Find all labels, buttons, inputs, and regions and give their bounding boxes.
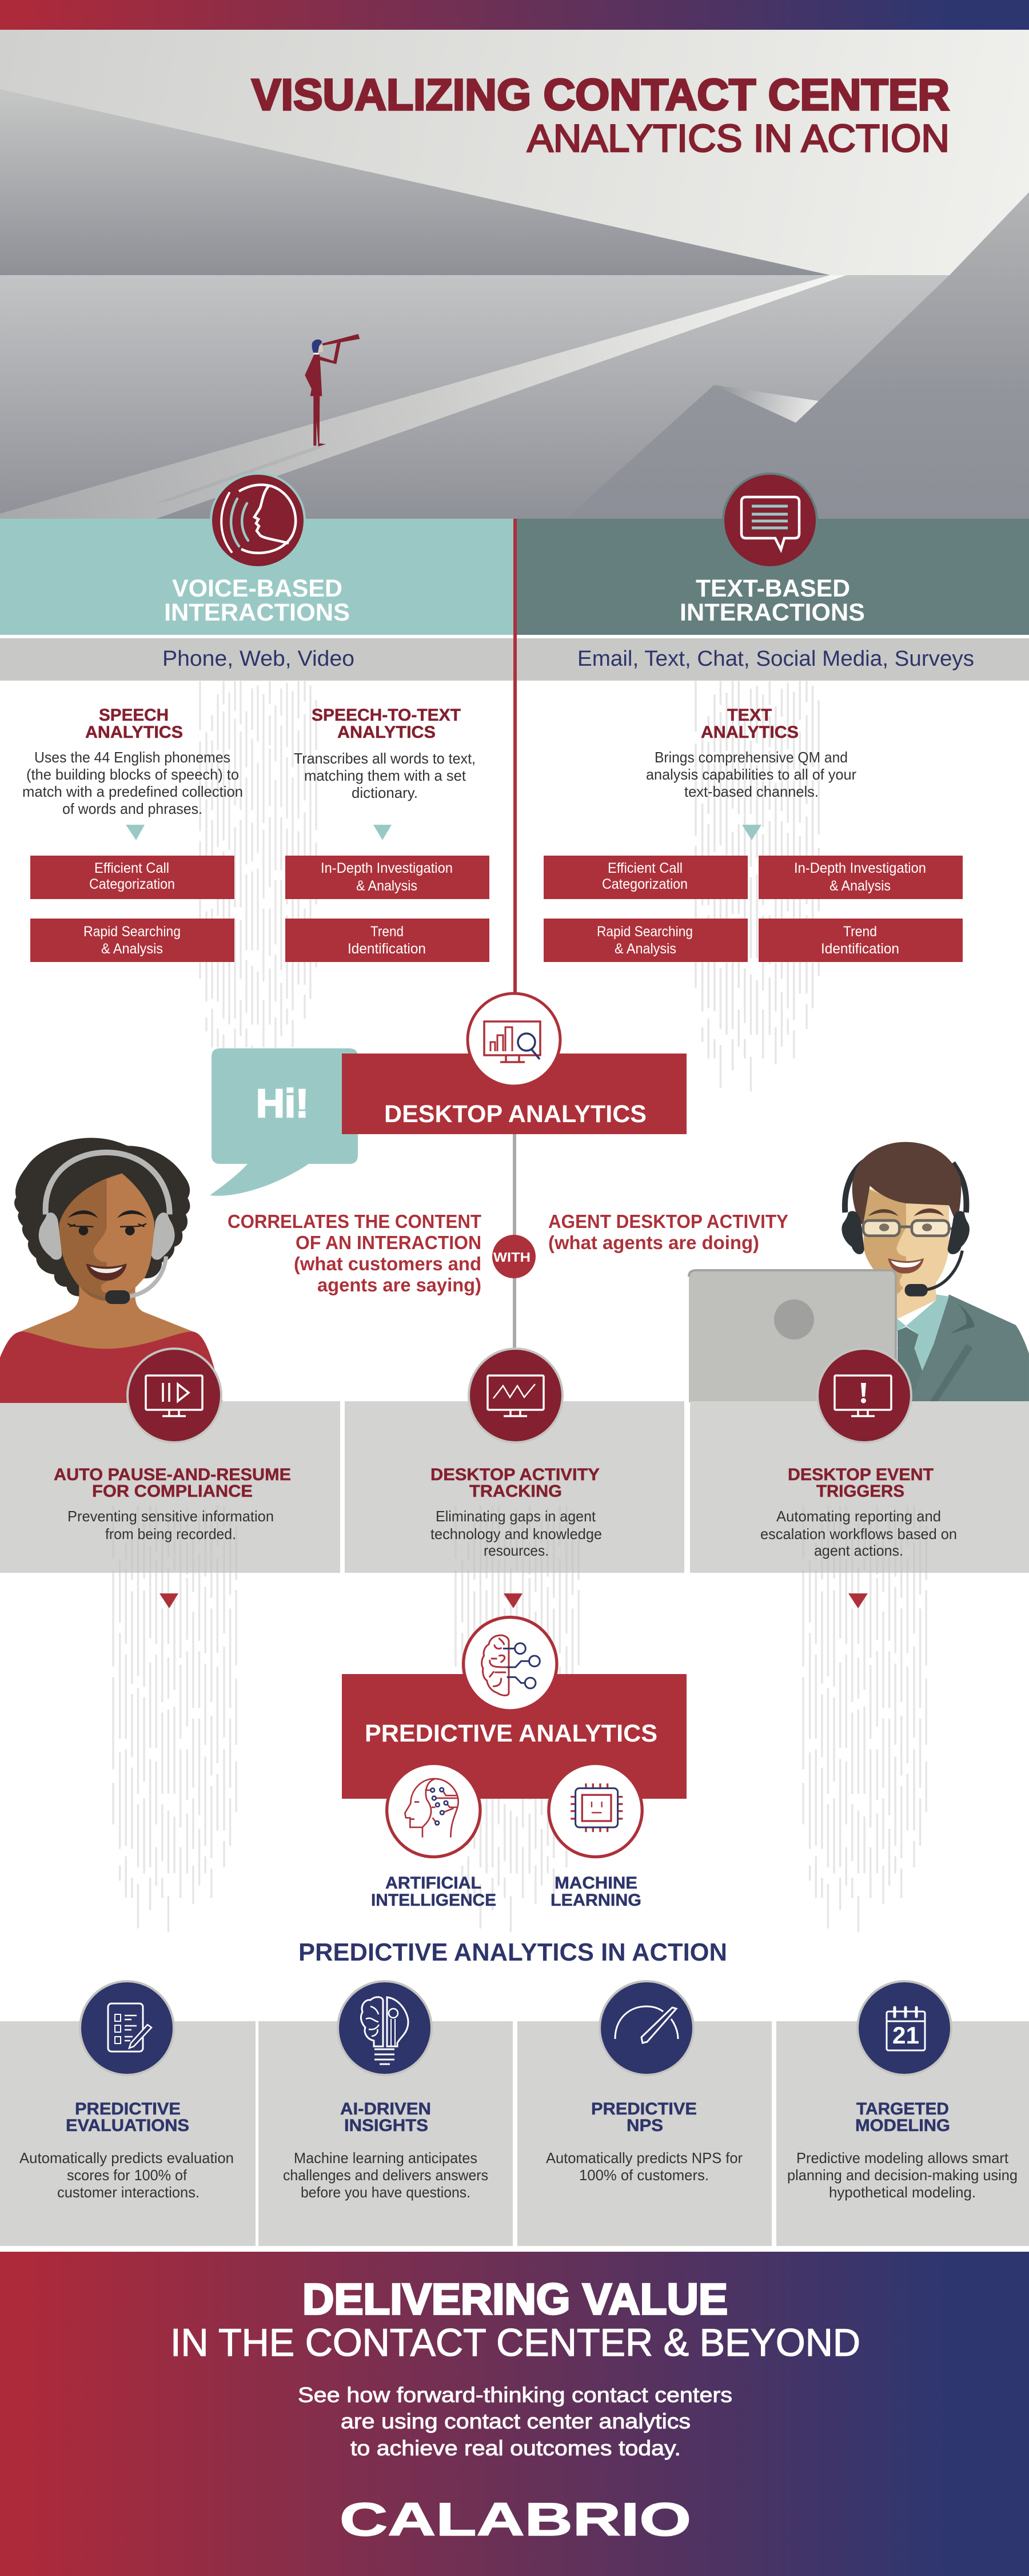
panel: AI-driven insights: INSIGHTS	[344, 2116, 428, 2135]
footer text: are using contact center analytics	[341, 2410, 691, 2433]
panel: predictive evaluations: scores for 100% of	[67, 2166, 188, 2184]
laptop	[689, 1269, 897, 1402]
text: desktop activity tracking: TRACKING	[469, 1482, 562, 1501]
icon: calendar: 21	[892, 2022, 919, 2049]
streak overlay on panels	[113, 1506, 926, 1931]
panel: targeted modeling: MODELING	[855, 2116, 950, 2135]
data streak background: voice column	[200, 682, 316, 1079]
red feature boxes: text analytics: & Analysis	[829, 878, 891, 894]
text: desktop event triggers: escalation workflows based on	[760, 1525, 957, 1543]
text: desktop activity tracking: DESKTOP ACTIVITY	[430, 1465, 600, 1484]
speech bubble: Hi!	[210, 1048, 358, 1196]
text: desktop event triggers: Automating reporting and	[776, 1508, 941, 1525]
top gradient bar	[0, 0, 1029, 30]
icon: calendar	[856, 1980, 952, 2076]
panel: predictive evaluations: EVALUATIONS	[66, 2116, 189, 2135]
correlates text: (what customers and	[294, 1253, 481, 1274]
label: artificial intelligence: INTELLIGENCE	[371, 1891, 496, 1910]
red feature boxes: speech analytics: Efficient Call	[94, 860, 169, 876]
footer panel	[0, 2252, 1029, 2576]
block: speech-to-text analytics: ANALYTICS	[337, 723, 436, 742]
panel: voice-based header	[0, 519, 513, 635]
grey connector line	[513, 1134, 516, 1351]
block: text analytics: Brings comprehensive QM and	[655, 749, 848, 766]
text: desktop event triggers: agent actions.	[814, 1542, 903, 1559]
block: speech analytics: of words and phrases.	[62, 800, 202, 817]
panel: text-based header: TEXT-BASED	[696, 575, 850, 602]
text: desktop activity tracking: Eliminating gaps in agent	[436, 1508, 596, 1525]
panel: desktop event triggers	[690, 1401, 1029, 1573]
block: speech-to-text analytics: SPEECH-TO-TEXT	[312, 706, 461, 725]
footer heading	[170, 2275, 860, 2364]
red feature boxes: speech-to-text analytics: & Analysis	[356, 878, 417, 894]
banner: desktop analytics	[342, 1054, 687, 1134]
red feature boxes: speech analytics: & Analysis	[101, 941, 163, 957]
panel: AI-driven insights: before you have questions.	[301, 2184, 470, 2201]
panel: predictive NPS: NPS	[627, 2116, 663, 2135]
banner: predictive analytics	[342, 1674, 687, 1799]
block: speech analytics: SPEECH	[99, 706, 169, 725]
panel: predictive NPS: Automatically predicts NPS for	[546, 2149, 743, 2166]
panel: auto pause-and-resume	[0, 1401, 340, 1573]
panel: AI-driven insights	[258, 2021, 513, 2246]
panel: predictive NPS: PREDICTIVE	[591, 2100, 697, 2118]
title	[252, 70, 950, 160]
label: machine learning	[551, 1874, 641, 1910]
title: ANALYTICS IN ACTION	[527, 117, 950, 160]
text: desktop event triggers	[760, 1465, 957, 1559]
footer text: to achieve real outcomes today.	[350, 2436, 681, 2460]
block: text analytics: TEXT	[727, 706, 772, 725]
data streak background: activity column	[456, 1506, 579, 1931]
block: text analytics: analysis capabilities to all of your	[646, 766, 856, 783]
label: artificial intelligence: ARTIFICIAL	[385, 1874, 481, 1893]
text: desktop activity tracking: technology and knowledge	[430, 1525, 602, 1543]
panel: targeted modeling: Predictive modeling allows smart	[796, 2149, 1009, 2166]
data streak background: triggers column	[803, 1506, 926, 1931]
block: text analytics	[646, 706, 856, 840]
red feature boxes: text analytics: & Analysis	[615, 941, 676, 957]
panel: targeted modeling: planning and decision-making using	[787, 2166, 1018, 2184]
icon: voice profile	[210, 472, 306, 569]
footer text: See how forward-thinking contact centers	[298, 2383, 732, 2407]
label: artificial intelligence	[371, 1874, 496, 1910]
correlates text: agents are saying)	[317, 1274, 481, 1295]
icon: brain lightbulb	[337, 1980, 433, 2076]
panel: AI-driven insights: Machine learning anticipates	[294, 2149, 477, 2166]
red feature boxes: text analytics: Efficient Call	[608, 860, 683, 876]
channel bar: text: Email, Text, Chat, Social Media, Surveys	[577, 647, 974, 671]
data streak background: text column	[696, 682, 819, 1091]
block: speech analytics	[22, 706, 243, 840]
block: speech-to-text analytics: dictionary.	[352, 784, 418, 801]
panel: AI-driven insights: AI-DRIVEN	[340, 2100, 431, 2118]
red feature boxes: text analytics: Trend	[843, 924, 877, 940]
icon: activity monitor	[468, 1347, 564, 1444]
red feature boxes: text analytics: In-Depth Investigation	[794, 860, 926, 876]
text: desktop activity tracking: resources.	[484, 1542, 549, 1559]
correlates text: OF AN INTERACTION	[296, 1232, 481, 1253]
red vertical connector	[513, 519, 517, 993]
agent desktop activity text: AGENT DESKTOP ACTIVITY	[548, 1211, 788, 1232]
red feature boxes: speech-to-text analytics	[285, 856, 489, 962]
panel: targeted modeling: hypothetical modeling.	[829, 2184, 976, 2201]
block: speech-to-text analytics	[294, 706, 476, 840]
block: text analytics: text-based channels.	[684, 783, 819, 800]
footer text	[298, 2383, 732, 2460]
block: speech-to-text analytics: Transcribes all words to text,	[294, 750, 476, 767]
text: auto pause-and-resume: AUTO PAUSE-AND-RESUME	[54, 1465, 291, 1484]
figure with telescope	[305, 334, 360, 447]
with badge: WITH	[493, 1250, 531, 1265]
icon: pause and play monitor	[126, 1347, 222, 1444]
text: desktop event triggers: TRIGGERS	[816, 1482, 904, 1501]
block: speech analytics: (the building blocks of speech) to	[26, 766, 239, 783]
red feature boxes: text analytics: Identification	[821, 941, 899, 957]
label: machine learning: MACHINE	[555, 1874, 637, 1893]
red feature boxes: speech-to-text analytics: Identification	[348, 941, 426, 957]
agent desktop activity text: (what agents are doing)	[548, 1232, 759, 1253]
panel: predictive evaluations: customer interactions.	[57, 2184, 200, 2201]
panel: predictive NPS: 100% of customers.	[579, 2166, 709, 2184]
dress overlap strip	[0, 1400, 137, 1403]
block: speech analytics: ANALYTICS	[85, 723, 183, 742]
agent illustration: man with headset	[841, 1142, 1029, 1402]
icon: AI head	[387, 1763, 480, 1857]
correlates text	[228, 1211, 481, 1295]
icon: brain with nodes	[464, 1617, 557, 1711]
panel: text-based header: INTERACTIONS	[680, 599, 865, 626]
footer heading: DELIVERING VALUE	[302, 2275, 728, 2324]
red feature boxes: text analytics: Categorization	[602, 876, 688, 892]
text: auto pause-and-resume	[54, 1465, 291, 1543]
banner: predictive analytics: PREDICTIVE ANALYTICS	[365, 1720, 657, 1747]
block: text analytics: ANALYTICS	[701, 723, 799, 742]
panel: AI-driven insights: challenges and delivers answers	[283, 2166, 488, 2184]
block: speech-to-text analytics: matching them with a set	[304, 767, 466, 784]
panel: predictive evaluations: PREDICTIVE	[75, 2100, 181, 2118]
channel bar: voice	[0, 638, 513, 681]
panel: targeted modeling: TARGETED	[856, 2100, 949, 2118]
logo: CALABRIO: CALABRIO	[340, 2494, 691, 2546]
panel: predictive NPS	[517, 2021, 772, 2246]
panel: predictive evaluations: Automatically predicts evaluation	[19, 2149, 234, 2166]
text: auto pause-and-resume: from being recorded.	[105, 1525, 236, 1543]
red feature boxes: speech analytics: Categorization	[89, 876, 175, 892]
panel: voice-based header: INTERACTIONS	[164, 599, 350, 626]
hero illustration: mountain landscape	[0, 30, 1029, 519]
panel: voice-based header: VOICE-BASED	[172, 575, 342, 602]
panel: targeted modeling	[776, 2021, 1029, 2246]
text: auto pause-and-resume: Preventing sensitive information	[67, 1508, 274, 1525]
icon: chat bubble	[722, 472, 818, 569]
red feature boxes: speech-to-text analytics: In-Depth Investigation	[321, 860, 453, 876]
icon: desktop analytics monitor	[468, 993, 560, 1086]
block: speech analytics: match with a predefined collection	[22, 783, 243, 800]
icon: machine learning chip	[549, 1763, 642, 1857]
agent desktop activity text	[548, 1211, 788, 1253]
speech bubble: Hi!: Hi!	[256, 1081, 309, 1126]
red feature boxes: text analytics	[544, 856, 963, 962]
agent illustration: woman with headset	[0, 1138, 223, 1403]
red feature boxes: text analytics: Rapid Searching	[597, 924, 693, 940]
channel bar: voice: Phone, Web, Video	[162, 647, 354, 671]
text: desktop event triggers: DESKTOP EVENT	[788, 1465, 934, 1484]
text: desktop activity tracking	[430, 1465, 602, 1559]
panel: text-based header	[517, 519, 1029, 635]
icon: evaluation checklist	[79, 1980, 175, 2076]
block: speech analytics: Uses the 44 English phonemes	[34, 749, 230, 766]
heading: predictive analytics in action: PREDICTIVE ANALYTICS IN ACTION	[298, 1938, 727, 1966]
title: VISUALIZING CONTACT CENTER	[252, 70, 950, 120]
icon: NPS gauge	[599, 1980, 695, 2076]
channel bar: text	[517, 638, 1029, 681]
red feature boxes: speech analytics: Rapid Searching	[83, 924, 181, 940]
red feature boxes: speech-to-text analytics: Trend	[370, 924, 404, 940]
panel: predictive evaluations	[0, 2021, 256, 2246]
banner: desktop analytics: DESKTOP ANALYTICS	[384, 1100, 647, 1128]
correlates text: CORRELATES THE CONTENT	[228, 1211, 481, 1232]
with badge	[492, 1235, 536, 1278]
text: auto pause-and-resume: FOR COMPLIANCE	[92, 1482, 253, 1501]
red feature boxes: speech analytics	[30, 856, 234, 962]
footer heading: IN THE CONTACT CENTER & BEYOND	[170, 2321, 860, 2364]
data streak background: pause column	[113, 1506, 236, 1931]
icon: alert monitor	[816, 1347, 912, 1444]
arrows: red down triangles	[159, 1593, 868, 1608]
label: machine learning: LEARNING	[551, 1891, 641, 1910]
panel: desktop activity tracking	[345, 1401, 684, 1573]
